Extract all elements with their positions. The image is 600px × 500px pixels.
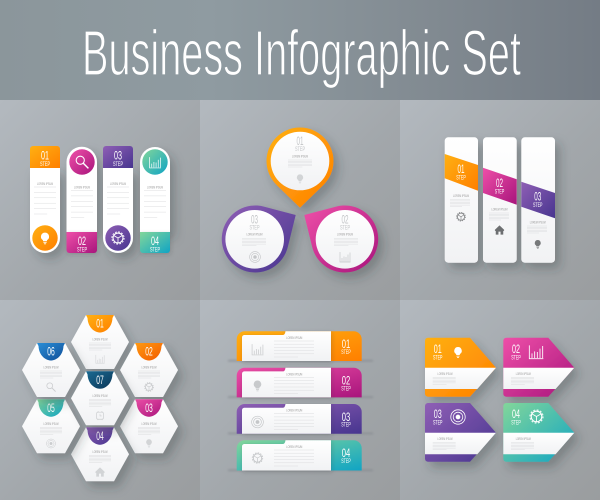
card 01: 01 (458, 162, 465, 176)
row 01: 01 (342, 337, 350, 351)
card 02 (483, 137, 517, 263)
card 04: LOREM IPSUM (516, 437, 531, 441)
pin 01: STEP (295, 146, 305, 153)
card 03 (425, 403, 496, 462)
panel: four horizontal rows (200, 300, 400, 500)
card 01: 01 (434, 342, 442, 356)
hexagon 06: 06 (47, 344, 55, 358)
hexagon 05: LOREM IPSUM (44, 422, 58, 426)
card 04: STEP (511, 420, 521, 426)
row 02: 02 (342, 374, 350, 388)
row 01 (228, 331, 373, 362)
card 03 (521, 137, 555, 263)
panel: three slanted-band cards (400, 100, 600, 300)
card 01: LOREM IPSUM (438, 372, 452, 376)
hexagon 01: LOREM IPSUM (92, 338, 108, 342)
pin 02 (304, 205, 378, 272)
hexagon 04: 04 (96, 429, 104, 443)
pin 03: STEP (250, 224, 260, 232)
card 02: STEP (511, 354, 521, 362)
pin 01 (266, 128, 333, 208)
card 04: LOREM IPSUM (147, 186, 163, 190)
card 04 (140, 147, 170, 254)
card 02: STEP (77, 246, 87, 254)
card 02: LOREM IPSUM (492, 208, 508, 212)
card 03: LOREM IPSUM (438, 437, 452, 441)
card 03: STEP (433, 420, 442, 426)
hexagon 05: 05 (47, 401, 55, 415)
card 01 (445, 137, 478, 263)
hexagon 01 (71, 315, 129, 369)
panel: four vertical pill cards (0, 100, 200, 300)
card 03: 03 (534, 190, 541, 204)
hexagon 04 (71, 427, 129, 481)
card 01: LOREM IPSUM (453, 194, 469, 198)
card 04: STEP (150, 246, 160, 254)
hexagon 05 (22, 399, 80, 453)
card 03: STEP (533, 202, 542, 209)
row 03: STEP (341, 422, 351, 429)
pin 03: 03 (251, 212, 258, 226)
row 03: 03 (342, 410, 350, 424)
card 02: STEP (495, 188, 504, 196)
panel: four arrow cards (400, 300, 600, 500)
hexagon 03: 03 (145, 401, 153, 415)
card 03: STEP (113, 161, 123, 168)
card 01: STEP (456, 174, 466, 182)
card 04: 04 (512, 407, 520, 421)
pin 03: LOREM IPSUM (246, 233, 262, 237)
row 02: STEP (341, 385, 351, 392)
card 02: LOREM IPSUM (74, 186, 90, 190)
hexagon 06: LOREM IPSUM (44, 366, 58, 370)
panel: seven hexagons (0, 300, 200, 500)
card 04 (503, 403, 574, 462)
card 03: LOREM IPSUM (530, 221, 546, 225)
hexagon 01: 01 (96, 316, 104, 330)
pin 01: LOREM IPSUM (292, 154, 308, 158)
hexagon 02: 02 (145, 344, 153, 358)
panel: three circular pins (200, 100, 400, 300)
hexagon 07: 07 (96, 373, 104, 387)
hexagon 02 (120, 343, 178, 397)
row 04: LOREM IPSUM (286, 445, 302, 449)
row 03: LOREM IPSUM (286, 409, 302, 413)
pin 02: STEP (340, 224, 350, 232)
row 04: STEP (341, 458, 351, 465)
row 01: LOREM IPSUM (286, 336, 302, 340)
pin 03 (222, 205, 296, 272)
row 02: LOREM IPSUM (286, 372, 302, 376)
pin 02: LOREM IPSUM (337, 233, 353, 237)
row 02 (228, 368, 373, 398)
card 02: LOREM IPSUM (516, 372, 531, 376)
hexagon 02: LOREM IPSUM (142, 366, 156, 370)
title band background (0, 0, 600, 100)
card 02 (503, 338, 574, 397)
card 01: 01 (41, 148, 49, 162)
hexagon 03 (120, 399, 178, 453)
row 01: STEP (341, 349, 351, 356)
card 02: 02 (512, 342, 520, 356)
card 03: LOREM IPSUM (110, 182, 126, 186)
row 03 (228, 404, 373, 434)
card 02: 02 (78, 234, 86, 248)
card 01: STEP (433, 354, 442, 362)
card 03: 03 (434, 407, 442, 421)
card 01 (425, 338, 496, 397)
hexagon 04: LOREM IPSUM (92, 450, 108, 454)
hexagon 06 (22, 343, 80, 397)
card 01 (30, 146, 60, 253)
row 04 (228, 440, 373, 471)
card 03 (103, 146, 133, 253)
pin 02: 02 (342, 212, 349, 226)
pin 01: 01 (296, 134, 304, 148)
card 02 (66, 147, 97, 254)
card 01: LOREM IPSUM (37, 182, 53, 186)
card 02: 02 (496, 176, 503, 190)
hexagon 03: LOREM IPSUM (142, 422, 156, 426)
card 01: STEP (40, 161, 50, 168)
hexagon 07 (71, 371, 129, 425)
card 04: 04 (151, 234, 159, 248)
row 04: 04 (342, 446, 350, 460)
hexagon 07: LOREM IPSUM (92, 394, 108, 398)
card 03: 03 (114, 148, 122, 162)
